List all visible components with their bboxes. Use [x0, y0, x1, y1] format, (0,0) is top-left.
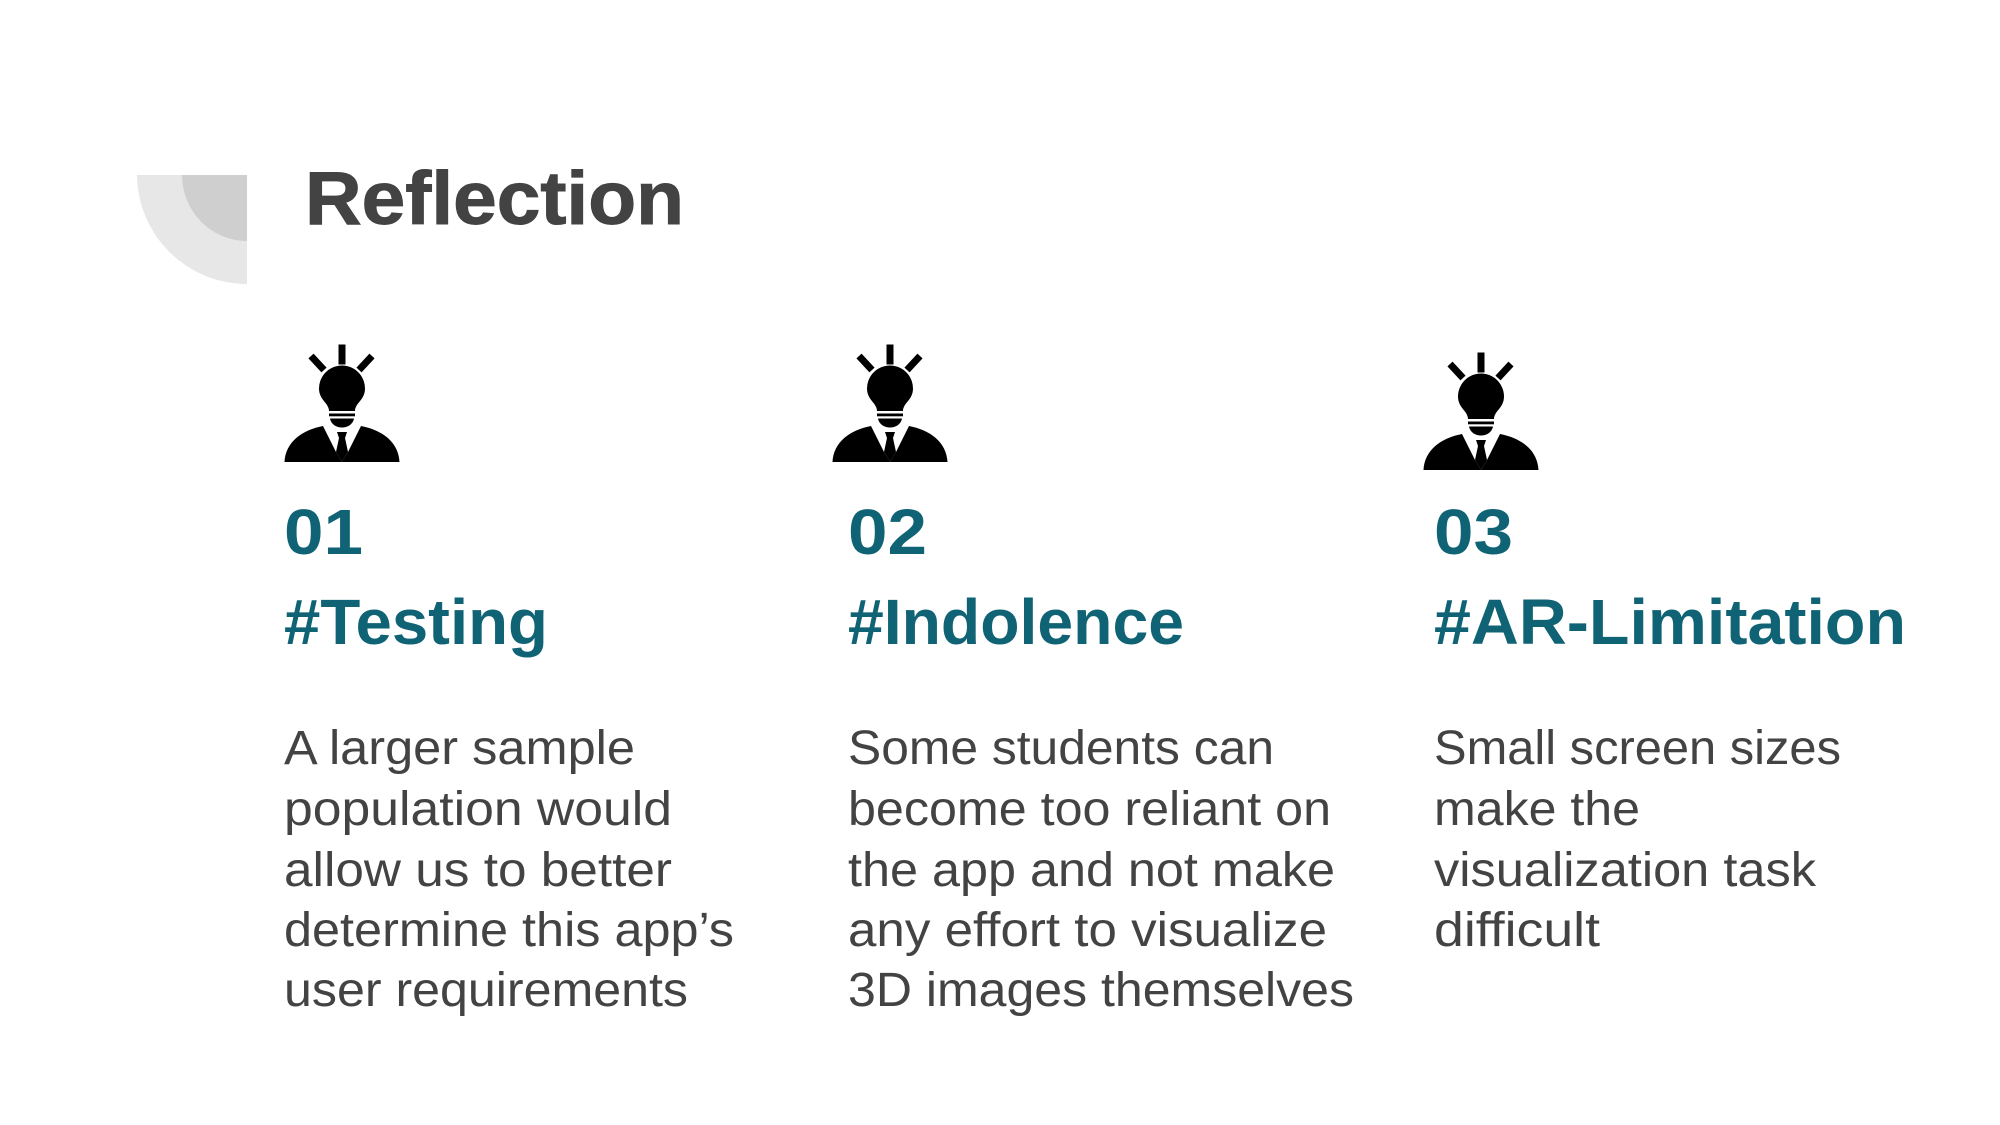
- body text: indolence: become too reliant on: [848, 783, 1331, 836]
- icon: person with light bulb head: [284, 344, 400, 462]
- heading: testing: #Testing: [284, 586, 548, 658]
- body text: indolence: any effort to visualize: [848, 904, 1327, 957]
- body text: AR limitation: difficult: [1434, 904, 1600, 957]
- body text: testing: allow us to better: [284, 844, 672, 897]
- number 01: 01: [284, 496, 363, 568]
- number 02: 02: [848, 496, 927, 568]
- body text: testing: [284, 722, 734, 1017]
- heading: AR limitation: #AR-Limitation: [1434, 586, 1906, 658]
- body text: indolence: Some students can: [848, 722, 1274, 775]
- heading: indolence: #Indolence: [848, 586, 1184, 658]
- body text: indolence: 3D images themselves: [848, 964, 1354, 1017]
- panel: indolence: [832, 344, 1354, 1017]
- icon: person with light bulb head: [832, 344, 948, 462]
- panel: AR limitation: [1424, 352, 1906, 957]
- body text: indolence: the app and not make: [848, 844, 1335, 897]
- body text: AR limitation: [1434, 722, 1841, 957]
- number 03: 03: [1434, 496, 1513, 568]
- icon: person with light bulb head: [1424, 352, 1538, 470]
- body text: AR limitation: visualization task: [1434, 844, 1817, 897]
- body text: indolence: [848, 722, 1354, 1017]
- corner decoration: [137, 175, 247, 284]
- title: Reflection: [305, 156, 684, 240]
- panel: testing: [284, 344, 734, 1017]
- body text: testing: population would: [284, 783, 672, 836]
- body text: AR limitation: Small screen sizes: [1434, 722, 1841, 775]
- body text: testing: user requirements: [284, 964, 688, 1017]
- body text: testing: determine this app’s: [284, 904, 734, 957]
- body text: testing: A larger sample: [284, 722, 635, 775]
- body text: AR limitation: make the: [1434, 783, 1640, 836]
